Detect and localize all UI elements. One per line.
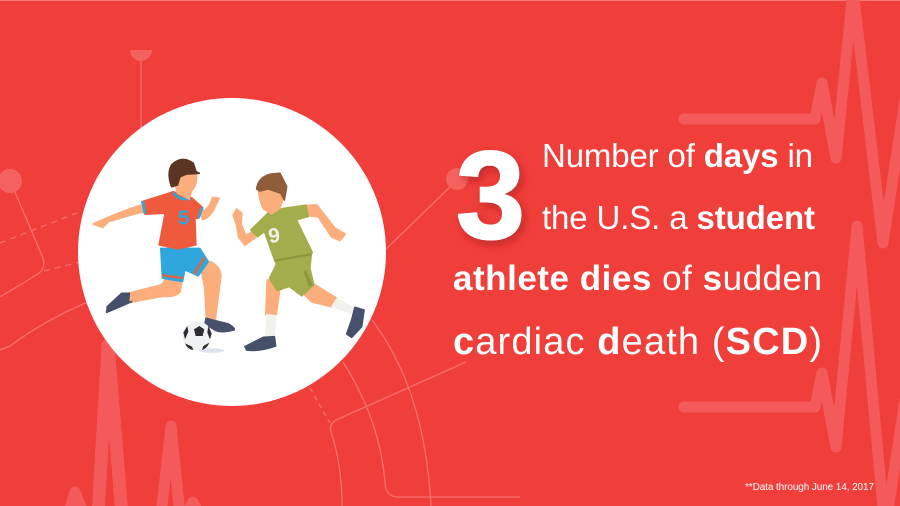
background ECG line: bottom left bbox=[68, 345, 198, 506]
soccer ball bbox=[183, 321, 212, 351]
back shoe bbox=[347, 307, 364, 337]
number 5: 5 bbox=[178, 207, 189, 230]
head bbox=[258, 187, 283, 214]
background ECG line: lower right bbox=[684, 226, 900, 506]
front sock bbox=[265, 314, 277, 337]
front arm bbox=[233, 209, 255, 245]
front leg bbox=[202, 262, 221, 321]
shirt bbox=[142, 192, 203, 249]
player 9 upper body bbox=[233, 173, 345, 262]
front arm bbox=[200, 198, 219, 219]
back leg bbox=[305, 285, 337, 307]
back arm bbox=[307, 205, 345, 240]
line 2: the U.S. a student bbox=[542, 199, 815, 236]
back sock bbox=[331, 298, 356, 315]
back shoe bbox=[107, 293, 132, 312]
player 9 legs bbox=[245, 252, 364, 350]
line 1: Number of days in bbox=[542, 137, 813, 174]
illustration: two soccer players bbox=[93, 160, 364, 353]
shirt bbox=[251, 205, 312, 262]
footnote: **Data through June 14, 2017 bbox=[745, 482, 874, 493]
hair bbox=[169, 160, 199, 187]
head bbox=[173, 172, 197, 199]
player 5 legs and ball bbox=[107, 248, 234, 353]
big number 3: 3 bbox=[456, 127, 525, 265]
background circuit lines bbox=[0, 50, 520, 506]
background ECG line: top right bbox=[684, 0, 900, 243]
statement text bbox=[453, 137, 822, 363]
white circle bbox=[78, 98, 386, 406]
ball shadow bbox=[199, 348, 224, 353]
player 5 upper body bbox=[93, 160, 219, 249]
back arm bbox=[93, 205, 145, 227]
shorts bbox=[161, 248, 208, 282]
front shoe bbox=[245, 337, 276, 350]
front shoe bbox=[205, 318, 234, 332]
shorts bbox=[269, 252, 314, 296]
hair bbox=[257, 173, 287, 200]
number 9: 9 bbox=[267, 224, 281, 248]
shirt cuffs and collar bbox=[143, 192, 202, 218]
line 3: athlete dies of sudden bbox=[453, 259, 822, 298]
front leg bbox=[266, 280, 280, 315]
back leg bbox=[128, 278, 182, 302]
line 4: cardiac death (SCD) bbox=[453, 321, 822, 363]
